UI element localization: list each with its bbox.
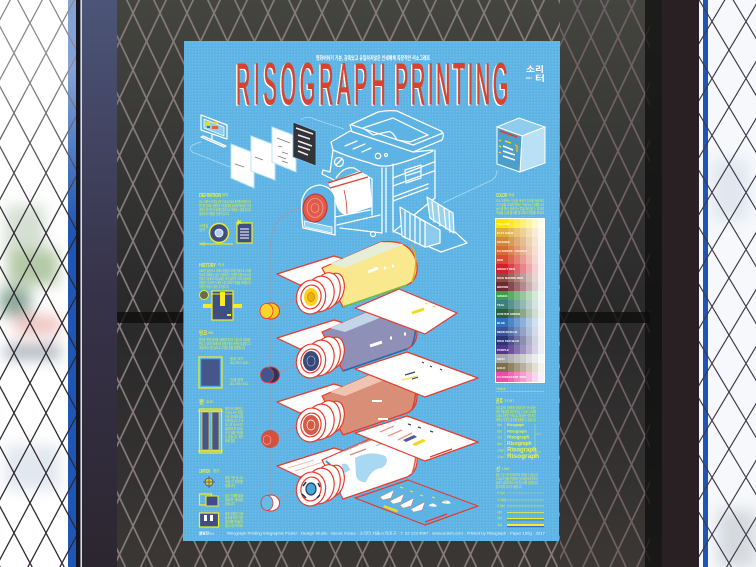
panel: font: 8pt xyxy=(497,442,502,446)
logo: 2017 xyxy=(526,76,532,80)
color swatch chart: FLUORESC. ORANGE xyxy=(497,249,527,253)
color swatch chart: ORANGE xyxy=(497,240,510,244)
color swatch chart: RISO MARINE RED xyxy=(497,276,523,280)
color swatch chart: GRAY xyxy=(497,357,505,361)
icon: ink machine xyxy=(200,290,242,320)
panel: definition: 리소그래프는 디지털 공판 인쇄 방식으로 원지를 제판합니다 xyxy=(199,199,252,204)
body xyxy=(322,150,435,233)
panel: definition xyxy=(199,192,252,246)
panel: ink: 용지 크기 xyxy=(230,356,243,361)
panel: font: Risograph xyxy=(507,423,524,427)
panel: font: 7pt xyxy=(497,436,502,440)
panel: master: 판 xyxy=(199,398,204,406)
panel: ink xyxy=(199,329,251,388)
subtitle: 평화어하기 기본, 감촉있고 유일하지않은 인쇄매체 독창적인 리소그래프 xyxy=(316,54,430,62)
color swatch chart: MEDIUM BLUE xyxy=(497,330,517,334)
panel: master: 인쇄 데이터를 통해 xyxy=(225,414,243,419)
title: PRINTING xyxy=(394,54,510,118)
panel: line: 0.25pt 이상을 권장하며 인쇄 해상도에 따라서 xyxy=(496,476,538,481)
panel: caption: 결과를 만들어 xyxy=(225,519,243,524)
control panel xyxy=(331,131,433,166)
color swatch chart: RISO FED BLUE xyxy=(497,339,519,343)
panel: font: Risograph xyxy=(507,434,530,440)
poster xyxy=(183,41,560,541)
icon: finished stack cube xyxy=(497,118,545,172)
panel: caption: CAPTION xyxy=(199,469,210,475)
panel: line: 0.5pt xyxy=(497,504,505,508)
panel: master: 필요하며 한 장으로 xyxy=(225,426,243,431)
panel: color: Yellow xyxy=(496,387,506,391)
color swatch chart xyxy=(495,218,545,383)
color swatch chart: FLAT GOLD xyxy=(497,231,513,235)
title: PRINTING xyxy=(395,53,511,117)
panel: line: 0.1pt xyxy=(497,491,505,495)
logo xyxy=(526,65,545,83)
process connector line xyxy=(270,208,300,503)
right frame column xyxy=(662,0,699,567)
panel: caption: 망점 표현은 인쇄 xyxy=(225,511,243,516)
panel: master xyxy=(198,398,243,453)
panel: ink: 번질 수 있으며 재생지와 궁합이 좋아 따뜻한 질감을 주고 xyxy=(199,341,251,346)
panel: history: HISTORY xyxy=(199,263,216,269)
color swatch chart: BLUE xyxy=(497,321,505,325)
roller 4: full colour xyxy=(277,433,417,509)
panel: ink: A3 297×420 xyxy=(230,361,248,365)
left frame column xyxy=(82,0,117,567)
panel: caption: 겹침 인쇄를 통해 xyxy=(225,493,243,498)
panel: caption: 새로운 색상을 xyxy=(225,497,243,502)
color swatch chart: GOLD xyxy=(497,366,505,370)
panel: history: 학교와 교회에서 널리 사용되었고 저렴한 비용으로 소량 xyxy=(199,272,251,277)
panel: history: 인쇄가 가능하여 오늘날에는 독립 출판과 디자이너들에게 xyxy=(199,276,251,281)
color swatch chart: RED xyxy=(497,258,503,262)
panel: caption: 캡션 xyxy=(213,468,219,473)
color swatch chart: BROWN xyxy=(497,285,508,289)
panel: color xyxy=(495,192,545,392)
panel: history: 사랑받고 있으며 전 세계 스튜디오에서 작품을 제작합니다 xyxy=(199,280,252,285)
panel: ink: 색상마다 다른 농도로 다양한 톤을 표현합니다 xyxy=(199,345,246,350)
panel: color: 리소그래프는 다양한 색상의 잉크를 제공하여 xyxy=(496,198,544,203)
panel: line: LINE xyxy=(502,467,510,471)
icon: monitor xyxy=(201,115,227,147)
sheet 1: yellow print xyxy=(355,289,457,334)
panel: caption xyxy=(199,468,243,528)
machine illustration xyxy=(322,111,467,252)
toner drum on machine xyxy=(300,172,372,235)
title: RISOGRAPH xyxy=(235,54,388,118)
panel: font: 6pt xyxy=(497,430,502,434)
panel: definition: 일본에서 개발된 인쇄기입니다 xyxy=(199,211,230,216)
panel: font: 작은 글자도 선명하게 인쇄되지만 가는 서체는 xyxy=(496,405,536,410)
icon: overlap xyxy=(200,494,218,506)
panel: definition: 스텐실 xyxy=(199,223,208,228)
logo: 터 xyxy=(535,74,545,83)
panel: caption: 농도에 따라 다른 xyxy=(225,515,243,520)
panel: caption: 냅니다 참고하세요 xyxy=(225,523,243,528)
panel: color: 농도에 따라 표현되는 톤을 확인할 수 있으며 xyxy=(496,206,544,211)
panel: definition: 색마다 한 번씩 인쇄하며 겹침으로 독특한 느낌을 냅니다 xyxy=(199,207,252,212)
panel: color: 색상 xyxy=(508,192,514,197)
icon: drum xyxy=(200,224,233,244)
panel: master: 이루어집니다. 각 색 xyxy=(225,418,243,423)
panel: definition: 드럼 xyxy=(199,241,205,246)
panel: font: 5pt xyxy=(497,423,502,427)
panel: master: 수 있습니다. 제작 xyxy=(225,434,243,439)
footer: 클럽진 xyxy=(199,530,209,536)
icon: master plates xyxy=(198,409,223,453)
panel: history: 다양한 색상이 계속 추가됩니다 xyxy=(199,284,230,289)
workflow sheets xyxy=(231,122,316,188)
panel: caption: 색상 간 위치를 xyxy=(225,479,243,484)
mesh panel xyxy=(117,0,662,567)
panel: ink: INK xyxy=(208,331,214,335)
panel: master: SIZE xyxy=(206,400,214,404)
right window view xyxy=(699,0,756,567)
ink red xyxy=(261,430,279,448)
panel: line: 1pt xyxy=(497,510,502,514)
title xyxy=(235,53,511,118)
color swatch chart: GREEN xyxy=(497,294,507,298)
sheet 4: full colour print xyxy=(355,480,478,525)
panel: definition: 콩기름 잉크를 사용하여 드럼을 통해 종이에 찍어내는 기계 xyxy=(199,203,251,208)
panel: line: 선 xyxy=(496,465,500,473)
panel: font: 10pt xyxy=(497,448,504,452)
panel: master: 수천 장을 인쇄할 xyxy=(225,430,243,435)
sheet 2: blue print xyxy=(355,352,478,397)
panel: font: 주세요 본문은 단색으로 처리하는 것이 좋고 xyxy=(496,413,536,418)
panel: definition: 잉크 xyxy=(199,227,205,232)
panel: history: 1980년 일본 리소 사에서 개발한 디지털 인쇄기로 시작해 xyxy=(199,268,251,273)
panel: caption: 정렬 기준 표시로 xyxy=(225,475,243,480)
panel: font: Risograph xyxy=(507,453,539,460)
icon: document stack xyxy=(236,219,252,243)
color swatch chart: YELLOW xyxy=(497,222,510,226)
panel: font: 제목은 다양한 효과를 활용할 수 있습니다 xyxy=(496,417,537,422)
panel: color: COLOR xyxy=(496,193,507,199)
small ink rollers xyxy=(260,298,298,511)
workflow connector lines xyxy=(190,117,497,203)
panel: color: 색상별 인쇄 결과를 참고하여 작업해 보세요 xyxy=(496,210,544,215)
panel: line: 0.25pt xyxy=(497,498,506,502)
output tray xyxy=(393,231,467,252)
panel: font: Risograph xyxy=(507,448,537,454)
color swatch chart: PURPLE xyxy=(497,348,509,352)
icon: ink paper xyxy=(199,357,222,388)
panel: caption: 맞춥니다 xyxy=(225,483,236,488)
ink clear xyxy=(261,495,280,511)
panel: ink: 콩기름 기반의 잉크를 사용하며 건조가 느립니다. 마찰에는 xyxy=(199,337,251,342)
panel: history xyxy=(199,262,252,320)
footer xyxy=(199,530,545,536)
ink blue xyxy=(260,367,280,383)
panel: ink: 인쇄 영역 xyxy=(230,377,243,382)
panel: ink: A3 291×413 xyxy=(230,382,248,386)
panel: line: 참고하여 주시기 바랍니다 xyxy=(496,484,523,489)
panel: font: Risograph xyxy=(507,441,532,447)
panel: caption: 얻습니다 xyxy=(225,501,236,506)
panel: line: 결과가 달라지므로 사전 테스트를 권장합니다 xyxy=(496,480,539,485)
color swatch chart: BRIGHT RED xyxy=(497,267,515,271)
panel: font: 12pt xyxy=(497,455,504,459)
panel: color: 각 드럼을 교체해 원하는 색상으로 인쇄합니다 xyxy=(496,202,545,207)
panel: line: 3pt xyxy=(497,523,502,527)
panel: font: 여러 색을 겹칠 경우 어긋날 수 있으니 주의해 xyxy=(496,409,536,414)
panel: font xyxy=(496,398,541,460)
panel: line: 얇은 선은 스캔 방식에 따라 끊어질 수 있습니다 xyxy=(496,472,539,477)
panel: font: 폰트 xyxy=(496,398,503,405)
panel: font: Risograph xyxy=(507,428,527,434)
panel: master: 스캐너 또는 파일 xyxy=(225,410,243,415)
panel: line: 2pt xyxy=(497,516,502,520)
panel: definition: DEFINITION xyxy=(199,193,221,199)
panel: line xyxy=(496,465,544,527)
roller 1: yellow xyxy=(277,241,417,317)
panel: master: 비용 절감 xyxy=(225,438,235,443)
panel: master: 원지의 제판은 xyxy=(225,406,243,411)
ink yellow xyxy=(260,303,280,319)
panel: ink: 잉크 xyxy=(199,329,207,337)
color swatch chart: TEAL xyxy=(497,303,505,307)
roller 3: red xyxy=(277,369,417,445)
panel: master: 하나의 마스터가 xyxy=(225,422,243,427)
icon: registration mark xyxy=(203,476,215,488)
sheet 3: red print xyxy=(355,416,478,461)
panel: font: FONT xyxy=(505,399,514,403)
panel: history: 역사 xyxy=(218,262,225,267)
footer: Risograph Printing Infographic Poster · Design Studio · Seoul, Korea · 소리터 서울시 마포구 · T. 02 123 4567 · www.sorieh.com · Printed by Risograph · Paper 100g · 2017 xyxy=(227,530,545,536)
icon: trapping xyxy=(200,513,218,527)
color swatch chart: FLUORESCENT PINK xyxy=(497,375,527,379)
scanner lid xyxy=(350,111,443,152)
footer: 2nd xyxy=(209,532,214,536)
left window view xyxy=(0,0,82,567)
title: RISOGRAPH xyxy=(236,53,389,117)
color swatch chart: HUNTER GREEN xyxy=(497,312,520,316)
logo: 소리 xyxy=(526,65,544,74)
panel: definition: 정의 xyxy=(222,192,228,197)
roller 2: blue xyxy=(277,305,417,381)
